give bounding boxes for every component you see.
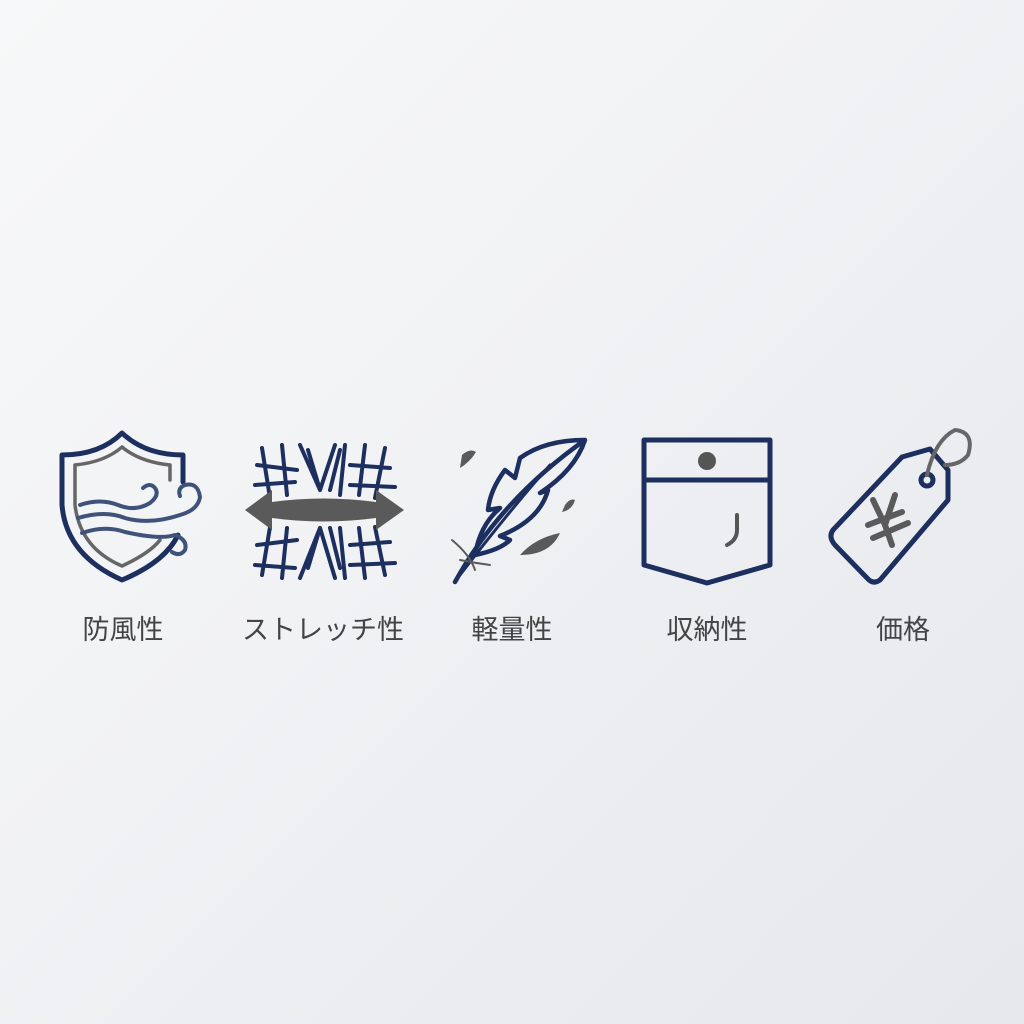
icon: stretch fabric <box>245 445 404 578</box>
label: storage: 収納性 <box>666 615 748 645</box>
label: windproof: 防風性 <box>82 615 164 645</box>
label: stretch: ストレッチ性 <box>242 615 404 645</box>
icon: shield with wind <box>62 433 200 580</box>
icon: feather <box>452 440 585 582</box>
label: price: 価格 <box>876 615 930 645</box>
icon: pocket <box>644 440 770 583</box>
label: lightweight: 軽量性 <box>472 615 552 645</box>
icon: price tag <box>831 430 970 582</box>
